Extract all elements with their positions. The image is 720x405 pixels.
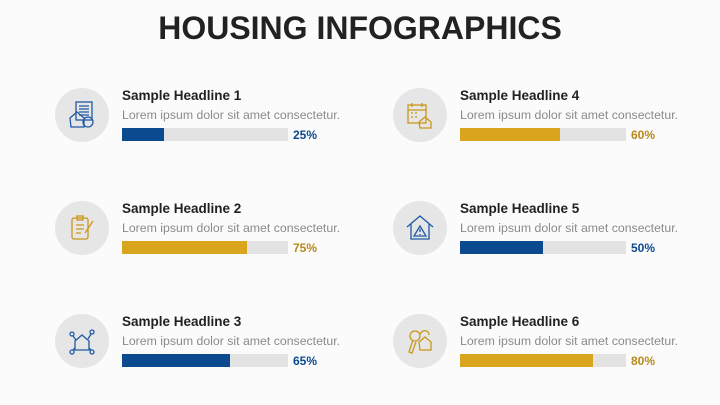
panel: headline 1 — [55, 88, 340, 142]
panel: headline 6 — [393, 314, 678, 368]
icon: house warning — [393, 201, 447, 255]
bar 80% — [460, 354, 626, 367]
panel: headline 3: 65% — [293, 354, 317, 368]
panel: headline 1: Sample Headline 1 — [122, 88, 241, 103]
panel: headline 5: Lorem ipsum dolor sit amet consectetur. — [460, 221, 678, 235]
bar 75% — [122, 241, 288, 254]
bar 25% — [122, 128, 288, 141]
panel: headline 1: 25% — [293, 128, 317, 142]
panel: headline 5: 50% — [631, 241, 655, 255]
panel: headline 2: Sample Headline 2 — [122, 201, 241, 216]
panel: headline 2 — [55, 201, 340, 255]
bar 50% — [460, 241, 626, 254]
icon: clipboard — [55, 201, 109, 255]
panel: headline 4: 60% — [631, 128, 655, 142]
panel: headline 1: Lorem ipsum dolor sit amet consectetur. — [122, 108, 340, 122]
panel: headline 5 — [393, 201, 678, 255]
panel: headline 3: Sample Headline 3 — [122, 314, 241, 329]
panel: headline 6: Lorem ipsum dolor sit amet consectetur. — [460, 334, 678, 348]
panel: headline 2: Lorem ipsum dolor sit amet consectetur. — [122, 221, 340, 235]
panel: headline 4 — [393, 88, 678, 142]
icon: key with house — [393, 314, 447, 368]
bar 65% — [122, 354, 288, 367]
panel: headline 5: Sample Headline 5 — [460, 201, 579, 216]
title: HOUSING INFOGRAPHICS — [158, 10, 562, 46]
icon: house with document — [55, 88, 109, 142]
bar 60% — [460, 128, 626, 141]
panel: headline 6: 80% — [631, 354, 655, 368]
panel: headline 2: 75% — [293, 241, 317, 255]
panel: headline 3 — [55, 314, 340, 368]
icon: calendar house — [393, 88, 447, 142]
panel: headline 3: Lorem ipsum dolor sit amet consectetur. — [122, 334, 340, 348]
panel: headline 6: Sample Headline 6 — [460, 314, 579, 329]
panel: headline 4: Lorem ipsum dolor sit amet consectetur. — [460, 108, 678, 122]
icon: house network — [55, 314, 109, 368]
panel: headline 4: Sample Headline 4 — [460, 88, 579, 103]
